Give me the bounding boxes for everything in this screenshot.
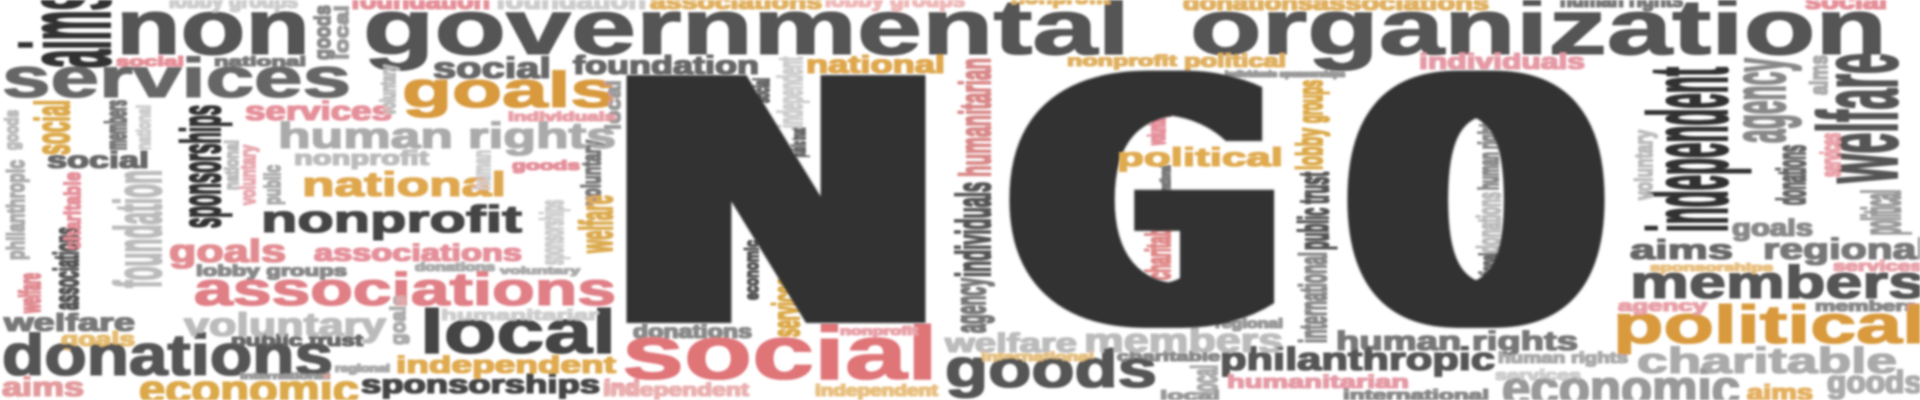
- left words: lower: goals: [388, 295, 410, 345]
- middle words around the letters: independent: [603, 380, 749, 400]
- left words: upper: national: [214, 53, 306, 69]
- left words: upper: social: [116, 53, 184, 69]
- middle words around the letters: donations: [633, 322, 752, 343]
- middle words around the letters: local: [1184, 365, 1225, 395]
- left words: lower: nonprofit: [261, 199, 523, 241]
- top strip words: [169, 0, 1887, 15]
- left words: lower: sponsorships: [361, 369, 600, 399]
- middle words around the letters: independent: [815, 381, 938, 400]
- left words: upper: human: [469, 150, 496, 190]
- word cloud: all background words: sponsorships: [534, 200, 570, 265]
- middle words around the letters: human rights: [1336, 326, 1578, 356]
- left words: upper: local: [332, 5, 352, 60]
- left words: upper: philanthropic: [3, 160, 30, 260]
- left words: lower: donations: [2, 323, 333, 388]
- middle words around the letters: welfare: [944, 328, 1077, 358]
- middle words around the letters: charitable: [1117, 348, 1220, 364]
- title: NGO big letters: G: [1001, 7, 1279, 400]
- middle words around the letters: political: [1184, 51, 1286, 71]
- left words: lower: regional: [335, 363, 390, 375]
- right words: donations: [1770, 145, 1814, 205]
- left words: upper: nonprofit: [294, 148, 430, 170]
- right words: political: [1852, 190, 1912, 235]
- middle words around the letters: international: [1293, 252, 1335, 343]
- right words: aims: [1630, 234, 1733, 265]
- left words: lower: goals: [61, 329, 135, 351]
- right words: voluntary: [1631, 130, 1658, 200]
- title: NGO big letters: N: [613, 7, 939, 400]
- middle words around the letters: philanthropic: [1220, 341, 1495, 377]
- left words: lower: welfare: [14, 273, 47, 313]
- left words: upper: voluntary: [378, 65, 400, 115]
- word cloud: all background words: welfare: [570, 195, 622, 253]
- middle words around the letters: groups: [1292, 80, 1330, 123]
- left words: lower: voluntary: [184, 306, 387, 343]
- middle words around the letters: economic: [742, 240, 762, 300]
- right words: goals: [1732, 215, 1813, 242]
- left words: upper: social: [47, 147, 149, 173]
- left words: upper: national: [222, 140, 242, 190]
- middle words around the letters: national: [806, 51, 945, 79]
- right words: agency: [1618, 298, 1707, 315]
- left words: upper: charitable: [60, 172, 85, 250]
- right words: members: [1630, 256, 1920, 308]
- left words: upper: national: [302, 166, 506, 204]
- middle words around the letters: humanitarian: [1227, 372, 1409, 392]
- middle words around the letters: services: [1495, 367, 1581, 384]
- middle words around the letters: public trust: [789, 128, 809, 157]
- middle words around the letters: regional: [1215, 315, 1283, 331]
- middle words around the letters: individuals: [948, 182, 1001, 277]
- right words: sponsorships: [1650, 262, 1773, 274]
- left words: lower: associations: [314, 240, 522, 267]
- title: NGO big letters: O: [1346, 7, 1606, 400]
- middle words around the letters: individuals: [1419, 49, 1585, 74]
- left words: upper: members: [100, 100, 133, 150]
- middle words around the letters: international: [981, 349, 1094, 364]
- middle words around the letters: lobby: [1289, 128, 1330, 170]
- left words: upper: local: [603, 80, 625, 130]
- left words: upper: goods: [2, 110, 22, 150]
- left words: upper: services: [2, 46, 351, 109]
- left words: upper: public: [260, 165, 285, 205]
- left words: lower: public trust: [231, 331, 363, 350]
- right words: political: [1613, 295, 1920, 355]
- middle words around the letters: [603, 49, 1628, 400]
- right words: members: [1815, 298, 1917, 315]
- left words: upper: voluntary: [576, 140, 606, 205]
- left words: upper: goals: [402, 62, 616, 118]
- left words: upper: social: [433, 52, 551, 85]
- left words: lower: international: [240, 371, 330, 381]
- left words: upper: social: [27, 100, 80, 155]
- middle words around the letters: individuals sponsorships: [1225, 69, 1345, 79]
- left words: lower: humanitarian: [441, 307, 604, 324]
- left words: lower: associations: [194, 263, 616, 315]
- right words: charitable: [1637, 340, 1897, 381]
- left words: lower: welfare: [2, 309, 135, 337]
- left words: lower: independent: [396, 352, 616, 379]
- middle words around the letters: voluntary: [1144, 112, 1171, 145]
- left words: lower: [2, 195, 640, 400]
- left words: lower: lobby groups: [196, 263, 347, 280]
- left words: lower: associations: [48, 227, 86, 310]
- right words: [1502, 53, 1920, 400]
- middle words around the letters: charitable: [1140, 217, 1178, 280]
- middle words around the letters: public trust: [1290, 172, 1337, 250]
- left words: upper: human rights: [278, 115, 616, 156]
- middle words around the letters: services: [766, 277, 808, 337]
- left words: upper: goods: [512, 157, 580, 173]
- left words: upper: [0, 0, 759, 288]
- middle words around the letters: donations: [1471, 192, 1507, 253]
- middle words around the letters: human rights: [1473, 117, 1504, 190]
- right words: regional: [1763, 233, 1920, 266]
- middle words around the letters: social: [749, 78, 774, 103]
- left words: lower: local: [420, 298, 616, 367]
- title: NGO big letters: [613, 7, 1606, 400]
- middle words around the letters: social: [622, 311, 938, 396]
- left words: upper: services: [245, 96, 392, 126]
- right words: services: [1833, 258, 1920, 275]
- left words: upper: individuals: [508, 109, 616, 124]
- right words: services: [1815, 133, 1846, 177]
- middle words around the letters: agency: [946, 278, 995, 333]
- middle words around the letters: members: [1084, 322, 1283, 360]
- right words: aims: [1806, 55, 1833, 95]
- middle words around the letters: national: [1474, 253, 1504, 287]
- left words: lower: voluntary: [500, 266, 581, 277]
- middle words around the letters: human rights: [1498, 350, 1628, 367]
- left words: lower: ind: [604, 377, 640, 399]
- left words: upper: foundation: [573, 50, 759, 80]
- middle words around the letters: international: [1157, 165, 1173, 205]
- left words: lower: donations: [415, 260, 495, 274]
- left words: lower: goals: [169, 233, 286, 269]
- word inside the G: political: political: [1117, 142, 1283, 172]
- left words: upper: voluntary: [238, 144, 260, 205]
- left words: upper: national: [134, 105, 154, 150]
- middle words around the letters: goods: [945, 339, 1157, 399]
- heading: non governmental organization: [116, 0, 1887, 71]
- middle words around the letters: nonprofit: [840, 324, 918, 338]
- middle words around the letters: nonprofit: [1067, 53, 1178, 70]
